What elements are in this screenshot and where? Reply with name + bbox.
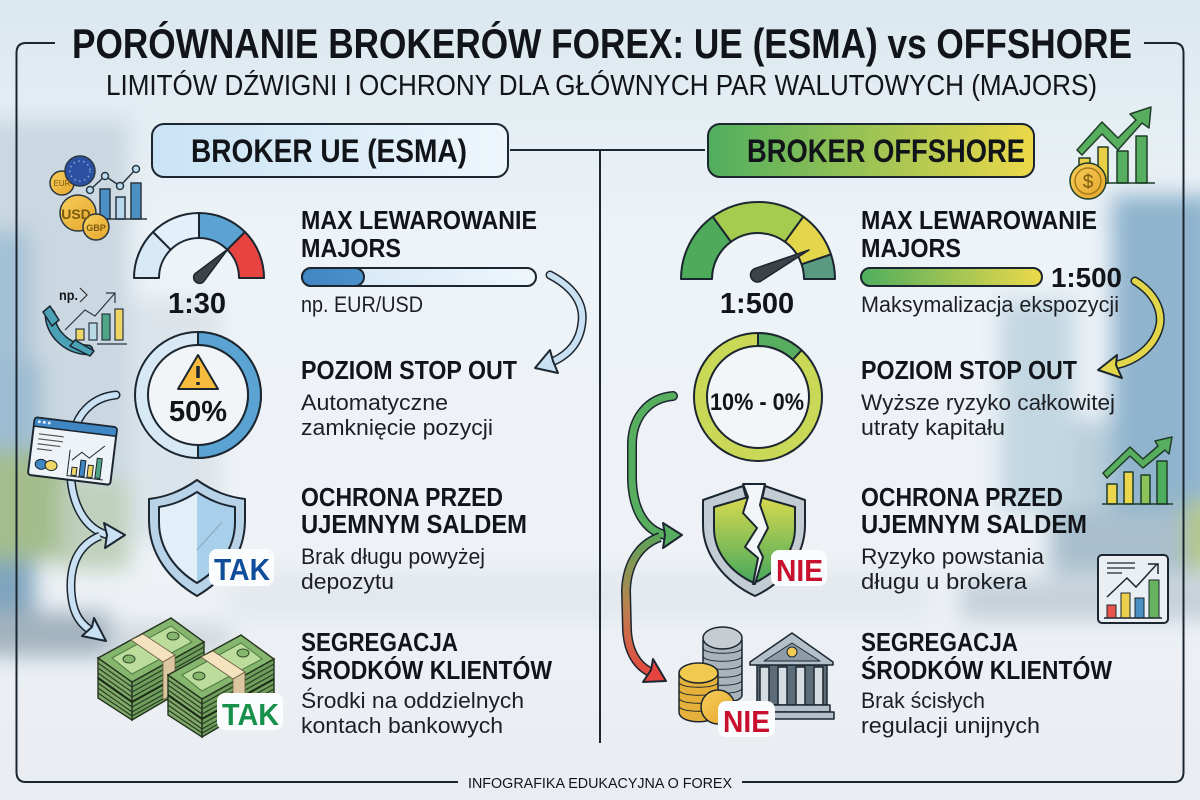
value: 1:30: 1:30 (168, 288, 226, 320)
metric: stop out: POZIOM STOP OUT (861, 355, 1077, 385)
metric: max leverage: MAJORS (861, 233, 961, 263)
ring: stop out 50% (135, 332, 261, 458)
badge: TAK money: TAK (222, 697, 280, 732)
metric: negative balance: Ryzyko powstania (861, 544, 1045, 569)
header: broker offshore (708, 124, 1034, 177)
icon: currency coins and chart: EUR (54, 179, 71, 188)
metric: max leverage: np. EUR/USD (301, 292, 423, 317)
header: broker offshore: BROKER OFFSHORE (747, 133, 1025, 169)
value: bar 1:500: 1:500 (1051, 262, 1122, 293)
metric: stop out: Automatyczne (301, 390, 448, 415)
arrows: right flow (626, 396, 682, 682)
header: broker UE: BROKER UE (ESMA) (191, 133, 467, 169)
metric: negative balance: OCHRONA PRZED (861, 482, 1063, 512)
metric: max leverage (301, 205, 537, 317)
metric: stop out: utraty kapitału (861, 415, 1005, 440)
value: 1:500: 1:500 (720, 288, 794, 320)
gold coin stack (679, 663, 735, 724)
ring: stop out 10%-0%: 10% - 0% (710, 389, 804, 416)
icon: dashboard card (28, 417, 117, 485)
gauge: 1:500 (681, 202, 835, 282)
icon: broken shield (703, 484, 805, 596)
metric: segregation (861, 627, 1112, 738)
metric: max leverage (861, 205, 1122, 317)
metric: segregation: SEGREGACJA (301, 627, 458, 657)
metric: negative balance (301, 482, 527, 594)
icon: currency coins and chart (50, 156, 147, 240)
bar: leverage (302, 268, 536, 286)
arrow: leverage to stop out (535, 275, 582, 373)
arrows: left flow (71, 395, 125, 641)
metric: stop out (861, 355, 1115, 440)
panel: broker offshore (626, 107, 1173, 739)
subtitle: LIMITÓW DŹWIGNI I OCHRONY DLA GŁÓWNYCH PAR WALUTOWYCH (MAJORS) (106, 69, 1097, 102)
bar: leverage (861, 268, 1042, 286)
ring: stop out 10%-0% (694, 333, 822, 461)
metric: negative balance: UJEMNYM SALDEM (861, 509, 1087, 539)
metric: segregation: SEGREGACJA (861, 627, 1018, 657)
icon: money stacks (98, 618, 274, 737)
silver coin stack (703, 627, 742, 702)
icon: coin and growth chart: $ (1083, 172, 1094, 193)
metric: negative balance: OCHRONA PRZED (301, 482, 503, 512)
ring: stop out 50%: 50% (169, 396, 227, 428)
metric: max leverage: Maksymalizacja ekspozycji (861, 292, 1119, 317)
icon: growth chart (1102, 437, 1173, 504)
metric: segregation (301, 627, 552, 738)
central divider (510, 150, 705, 743)
icon: coin and growth chart (1070, 107, 1155, 199)
metric: max leverage: MAJORS (301, 233, 401, 263)
icon: shield TAK (149, 480, 245, 596)
metric: negative balance: Brak długu powyżej (301, 544, 485, 569)
icon: coins and bank (679, 627, 834, 724)
metric: stop out (301, 355, 517, 440)
badge: NIE shield: NIE (776, 553, 823, 588)
metric: segregation: Środki na oddzielnych (301, 688, 524, 713)
icon: phone and chart: np. (59, 287, 78, 303)
metric: stop out: Wyższe ryzyko całkowitej (861, 390, 1115, 415)
metric: max leverage: MAX LEWAROWANIE (301, 205, 537, 235)
icon: warning (178, 355, 218, 389)
icon: currency coins and chart: GBP (86, 223, 106, 233)
metric: negative balance: UJEMNYM SALDEM (301, 509, 527, 539)
metric: max leverage: MAX LEWAROWANIE (861, 205, 1097, 235)
icon: phone and chart (43, 287, 127, 356)
metric: segregation: kontach bankowych (301, 713, 503, 738)
metric: stop out: POZIOM STOP OUT (301, 355, 517, 385)
metric: stop out: zamknięcie pozycji (301, 415, 493, 440)
footer: INFOGRAFIKA EDUKACYJNA O FOREX (468, 775, 732, 792)
header: broker UE (152, 124, 508, 177)
icon: currency coins and chart: USD (61, 206, 91, 222)
metric: segregation: Brak ścisłych (861, 688, 985, 713)
metric: negative balance: długu u brokera (861, 569, 1028, 594)
gauge: 1:30 (134, 213, 264, 283)
badge: NIE bank: NIE (723, 704, 770, 739)
metric: segregation: ŚRODKÓW KLIENTÓW (301, 655, 552, 685)
bank (748, 633, 834, 719)
metric: segregation: ŚRODKÓW KLIENTÓW (861, 655, 1112, 685)
arrow: leverage to stop out (1098, 281, 1160, 378)
panel: broker UE (28, 124, 582, 738)
metric: negative balance (861, 482, 1087, 594)
metric: segregation: regulacji unijnych (861, 713, 1040, 738)
icon: report card (1098, 555, 1168, 623)
badge: TAK shield: TAK (214, 552, 271, 587)
metric: negative balance: depozytu (301, 569, 394, 594)
